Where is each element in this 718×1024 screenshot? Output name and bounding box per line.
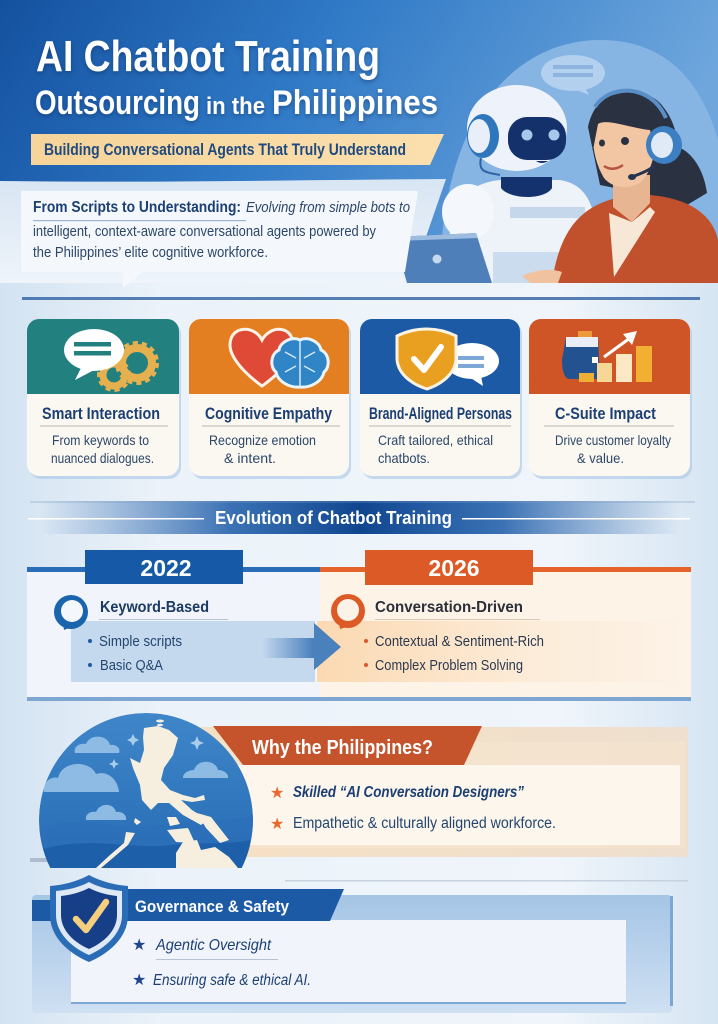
- card: c-suite impact: Drive customer loyalty: [555, 432, 671, 448]
- bullet: agentic oversight: Agentic Oversight: [155, 937, 272, 954]
- neck: [613, 175, 650, 222]
- card: brand-aligned personas: Brand-Aligned Personas: [369, 405, 512, 423]
- icon: heart and brain: [230, 329, 328, 387]
- column: 2022: 2022: [140, 555, 192, 581]
- speech bubble: [541, 55, 605, 95]
- divider: [285, 880, 688, 882]
- arrow: [262, 623, 341, 670]
- ribbon heading: Why the Philippines?: [252, 737, 433, 759]
- icon: briefcase and bars: [562, 331, 652, 382]
- bullet: agentic oversight: [132, 937, 278, 960]
- card: c-suite impact: [529, 319, 692, 479]
- agent: [522, 91, 718, 283]
- column: 2026: [317, 550, 678, 682]
- section banner: evolution: Evolution of Chatbot Training: [215, 508, 452, 528]
- illustration: robot and agent: [394, 40, 718, 283]
- bullet: safe ai: Ensuring safe & ethical AI.: [153, 972, 311, 989]
- card: brand-aligned personas: chatbots.: [378, 450, 430, 466]
- subtitle banner: Building Conversational Agents That Truly Understand: [44, 140, 406, 159]
- hand: [522, 270, 562, 283]
- intro callout: the Philippines’ elite cognitive workforce.: [33, 244, 268, 261]
- card: smart interaction: From keywords to: [52, 432, 149, 448]
- headset: [595, 91, 666, 118]
- card: cognitive empathy: [189, 319, 351, 479]
- divider: [22, 297, 700, 300]
- panel: governance and safety: [32, 875, 673, 1013]
- robot head: [467, 85, 567, 175]
- intro callout: From Scripts to Understanding:: [33, 199, 241, 216]
- card: smart interaction: [27, 319, 181, 479]
- bullet: skilled designers: Skilled “AI Conversation Designers”: [293, 784, 524, 801]
- icon: bubble and gears: [64, 329, 157, 390]
- card: c-suite impact: & value.: [577, 450, 624, 466]
- intro callout: Evolving from simple bots to: [246, 199, 410, 216]
- jacket: [552, 195, 718, 283]
- title: AI Chatbot Training: [36, 32, 380, 81]
- column: 2022: Simple scripts: [99, 634, 182, 650]
- ribbon heading: [213, 726, 482, 765]
- card: cognitive empathy: Cognitive Empathy: [205, 405, 333, 423]
- card: smart interaction: Smart Interaction: [42, 405, 160, 423]
- card: c-suite impact: C-Suite Impact: [555, 405, 656, 423]
- intro callout: [21, 191, 418, 288]
- panel: why the philippines: [30, 726, 688, 862]
- card: brand-aligned personas: Craft tailored, ethical: [378, 432, 493, 448]
- title: in the: [206, 93, 265, 120]
- bullet: skilled designers: ★: [270, 785, 284, 802]
- blouse: [609, 207, 655, 277]
- map islands: [96, 720, 238, 868]
- column: 2026: Complex Problem Solving: [375, 658, 523, 674]
- robot body: [442, 177, 592, 283]
- icon: shield and bubble: [397, 329, 499, 389]
- hair back and ponytail: [588, 92, 707, 205]
- icon: blue bubble: [54, 595, 88, 630]
- clouds: [44, 737, 228, 820]
- ribbon heading: [110, 889, 344, 921]
- card: cognitive empathy: & intent.: [224, 450, 276, 466]
- ribbon heading: Governance & Safety: [135, 898, 290, 916]
- card: smart interaction: nuanced dialogues.: [51, 450, 154, 466]
- card: cognitive empathy: Recognize emotion: [209, 432, 316, 448]
- column: 2022: Keyword-Based: [100, 599, 209, 616]
- header band: [0, 0, 718, 283]
- title: Outsourcing: [35, 84, 200, 122]
- column: 2026: Conversation-Driven: [375, 599, 523, 616]
- title: Philippines: [272, 84, 438, 122]
- inner card: [71, 920, 626, 1003]
- column: 2026: 2026: [428, 555, 480, 581]
- column: 2022: Basic Q&A: [100, 658, 163, 674]
- sparkles: [109, 734, 204, 769]
- bullet: workforce: Empathetic & culturally aligned workforce.: [293, 815, 556, 832]
- subtitle banner: [31, 134, 444, 165]
- column: 2022: [54, 550, 315, 682]
- evolution comparison panel: [27, 550, 691, 701]
- column: 2026: Contextual & Sentiment-Rich: [375, 634, 544, 650]
- section banner: evolution: [28, 501, 695, 534]
- bullet: safe ai: ★: [132, 972, 146, 989]
- icon: shield: [50, 875, 128, 962]
- intro callout: intelligent, context-aware conversational agents powered by: [33, 223, 376, 240]
- face: [594, 122, 653, 187]
- icon: orange bubble: [331, 594, 365, 629]
- laptop: [394, 233, 492, 283]
- bullet: workforce: ★: [270, 816, 284, 833]
- title: [35, 32, 438, 122]
- bullet: agentic oversight: ★: [132, 937, 146, 954]
- globe with philippines map: [39, 713, 253, 868]
- arch backdrop: [442, 40, 718, 240]
- card: brand-aligned personas: [360, 319, 522, 479]
